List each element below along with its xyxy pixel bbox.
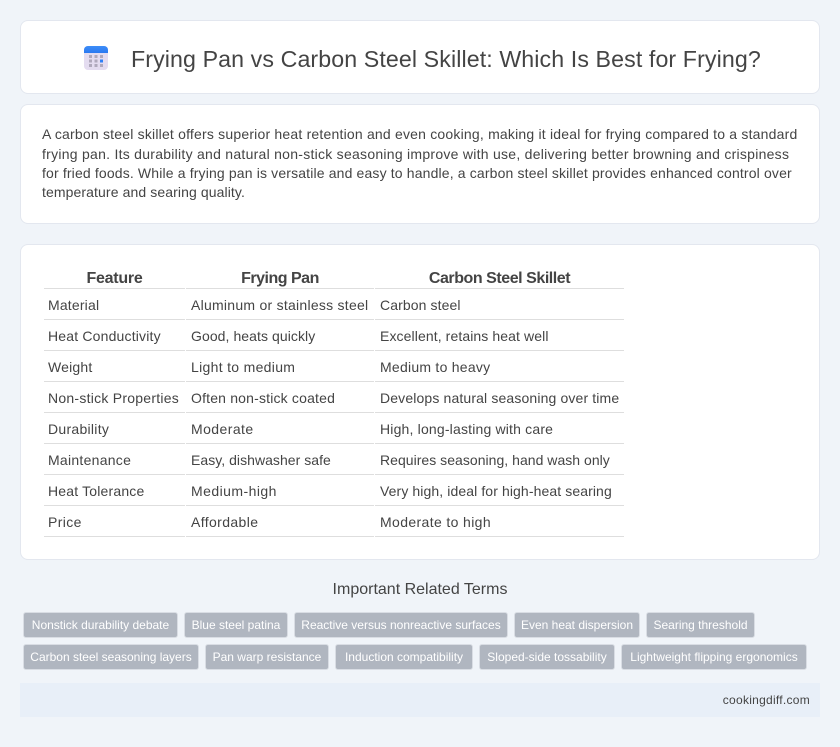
tag: Lightweight flipping ergonomics [630, 650, 798, 664]
tag: Sloped-side tossability [487, 650, 607, 664]
row: heat tolerance: Heat Tolerance [48, 483, 144, 499]
tag: Induction compatibility [345, 650, 463, 664]
row: heat conductivity: Good, heats quickly [191, 328, 315, 344]
table header row [86, 270, 570, 287]
panel: introduction text [20, 104, 820, 224]
tags: related terms [23, 612, 807, 670]
row: heat conductivity [48, 328, 549, 344]
row: durability: Durability [48, 421, 109, 437]
intro line 2: frying pan. Its durability and natural non-stick seasoning improve with use, delivering better browning and crispiness [42, 146, 789, 162]
row: heat tolerance: Very high, ideal for high-heat searing [380, 483, 612, 499]
row: heat tolerance: Medium-high [191, 483, 277, 499]
row: maintenance: Requires seasoning, hand wash only [380, 452, 610, 468]
row: non-stick properties: Non-stick Properties [48, 390, 179, 406]
heading: related terms: Important Related Terms [333, 581, 507, 598]
tag [335, 644, 473, 670]
row: heat tolerance [48, 483, 612, 499]
row: price: Moderate to high [380, 514, 491, 530]
intro line 1: A carbon steel skillet offers superior heat retention and even cooking, making it ideal for frying compared to a standard [42, 126, 797, 142]
tag [514, 612, 640, 638]
panel: comparison table [20, 244, 820, 560]
tag: Even heat dispersion [521, 618, 633, 632]
row: weight [48, 359, 490, 375]
row: non-stick properties: Develops natural seasoning over time [380, 390, 619, 406]
row: weight: Medium to heavy [380, 359, 490, 375]
title: Frying Pan vs Carbon Steel Skillet: Which Is Best for Frying? [131, 46, 761, 72]
tag [184, 612, 288, 638]
footer source: cookingdiff.com [723, 693, 810, 707]
tag: Blue steel patina [192, 618, 280, 632]
row: non-stick properties [48, 390, 619, 406]
row: durability: High, long-lasting with care [380, 421, 553, 437]
icon: calendar grid [84, 46, 108, 70]
tag [621, 644, 807, 670]
tag [23, 612, 178, 638]
footer bar [20, 683, 820, 717]
row: material: Carbon steel [380, 297, 461, 313]
row: material: Material [48, 297, 99, 313]
tag: Carbon steel seasoning layers [30, 650, 192, 664]
tag [23, 644, 199, 670]
tag: Reactive versus nonreactive surfaces [301, 618, 501, 632]
row: material: Aluminum or stainless steel [191, 297, 368, 313]
table header row: Carbon Steel Skillet [429, 270, 570, 287]
row: price [48, 514, 491, 530]
row: weight: Weight [48, 359, 92, 375]
tag [646, 612, 755, 638]
row: durability [48, 421, 553, 437]
row: heat conductivity: Excellent, retains heat well [380, 328, 549, 344]
tag: Pan warp resistance [213, 650, 321, 664]
intro line 4: temperature and searing quality. [42, 184, 245, 200]
row: maintenance [48, 452, 610, 468]
intro line 3: for fried foods. While a frying pan is versatile and easy to handle, a carbon steel skillet provides enhanced control over [42, 165, 792, 181]
row: price: Affordable [191, 514, 258, 530]
row: heat conductivity: Heat Conductivity [48, 328, 161, 344]
tag [205, 644, 329, 670]
tag [479, 644, 615, 670]
row: maintenance: Maintenance [48, 452, 131, 468]
row: price: Price [48, 514, 82, 530]
panel: title header [20, 20, 820, 94]
tag [294, 612, 508, 638]
row: non-stick properties: Often non-stick coated [191, 390, 335, 406]
tag: Nonstick durability debate [32, 618, 169, 632]
table header row: Feature [86, 270, 143, 287]
row: maintenance: Easy, dishwasher safe [191, 452, 331, 468]
row: durability: Moderate [191, 421, 254, 437]
table header row: Frying Pan [241, 270, 319, 287]
row: material [48, 297, 461, 313]
row: weight: Light to medium [191, 359, 295, 375]
tag: Searing threshold [653, 618, 748, 632]
